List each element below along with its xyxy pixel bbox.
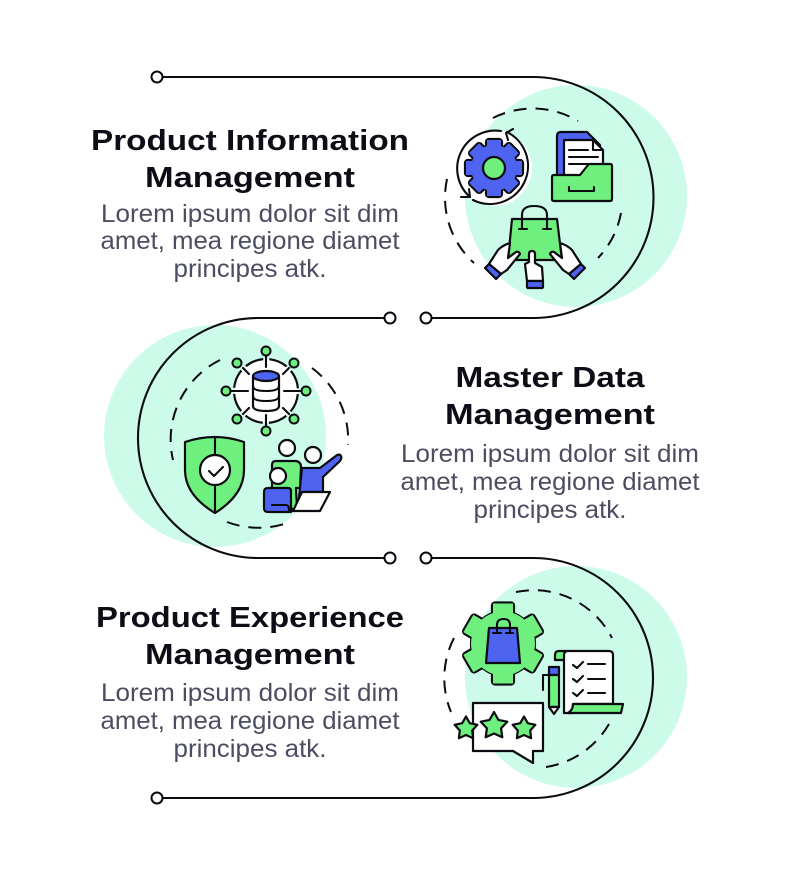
text block: section 1 description: Lorem ipsum dolor sit dim <box>101 200 399 228</box>
dashed ring: section 1 <box>445 108 621 263</box>
icon: database network <box>222 346 310 436</box>
mint circle: section 3 <box>465 566 687 788</box>
heading: Product Experience Management: Product Experience <box>96 602 404 634</box>
icon: document folder <box>552 132 612 201</box>
heading: Master Data Management <box>445 362 656 431</box>
heading: Product Experience Management <box>96 602 404 671</box>
icon: team at laptop <box>264 440 341 512</box>
icon: speech bubble with stars <box>455 703 543 763</box>
icon: shopping bag held by hands <box>485 206 585 288</box>
text block: section 3 description: amet, mea regione diamet <box>100 707 400 735</box>
connector line: section 2 <box>138 312 396 564</box>
mint circle: section 1 <box>465 85 687 307</box>
text block: section 3 description <box>100 679 400 763</box>
text block: section 3 description: principes atk. <box>174 735 326 763</box>
text block: section 2 description: amet, mea regione diamet <box>400 468 700 496</box>
heading: Product Information Management: Product Information <box>91 125 409 157</box>
text block: section 1 description: principes atk. <box>174 255 326 283</box>
icon: rotating gear <box>456 129 532 206</box>
icon: pencil <box>543 667 559 714</box>
dashed ring: section 2 <box>171 360 348 528</box>
text block: section 1 description: amet, mea regione diamet <box>100 227 400 255</box>
icon: security shield <box>185 437 244 513</box>
text block: section 3 description: Lorem ipsum dolor sit dim <box>101 679 399 707</box>
text block: section 2 description: principes atk. <box>474 496 626 524</box>
icon: gear with shopping bag <box>462 602 544 684</box>
heading: Master Data Management: Management <box>445 399 656 431</box>
text block: section 2 description <box>400 440 700 524</box>
connector line: section 1 <box>152 72 654 324</box>
heading: Master Data Management: Master Data <box>456 362 646 394</box>
heading: Product Information Management <box>91 125 409 194</box>
heading: Product Experience Management: Management <box>145 639 356 671</box>
dashed ring: section 3 <box>444 590 612 767</box>
text block: section 1 description <box>100 200 400 283</box>
icon: checklist scroll <box>555 651 623 713</box>
mint circle: section 2 <box>104 325 326 547</box>
text block: section 2 description: Lorem ipsum dolor sit dim <box>401 440 699 468</box>
heading: Product Information Management: Management <box>145 162 356 194</box>
connector line: section 3 <box>152 552 653 804</box>
